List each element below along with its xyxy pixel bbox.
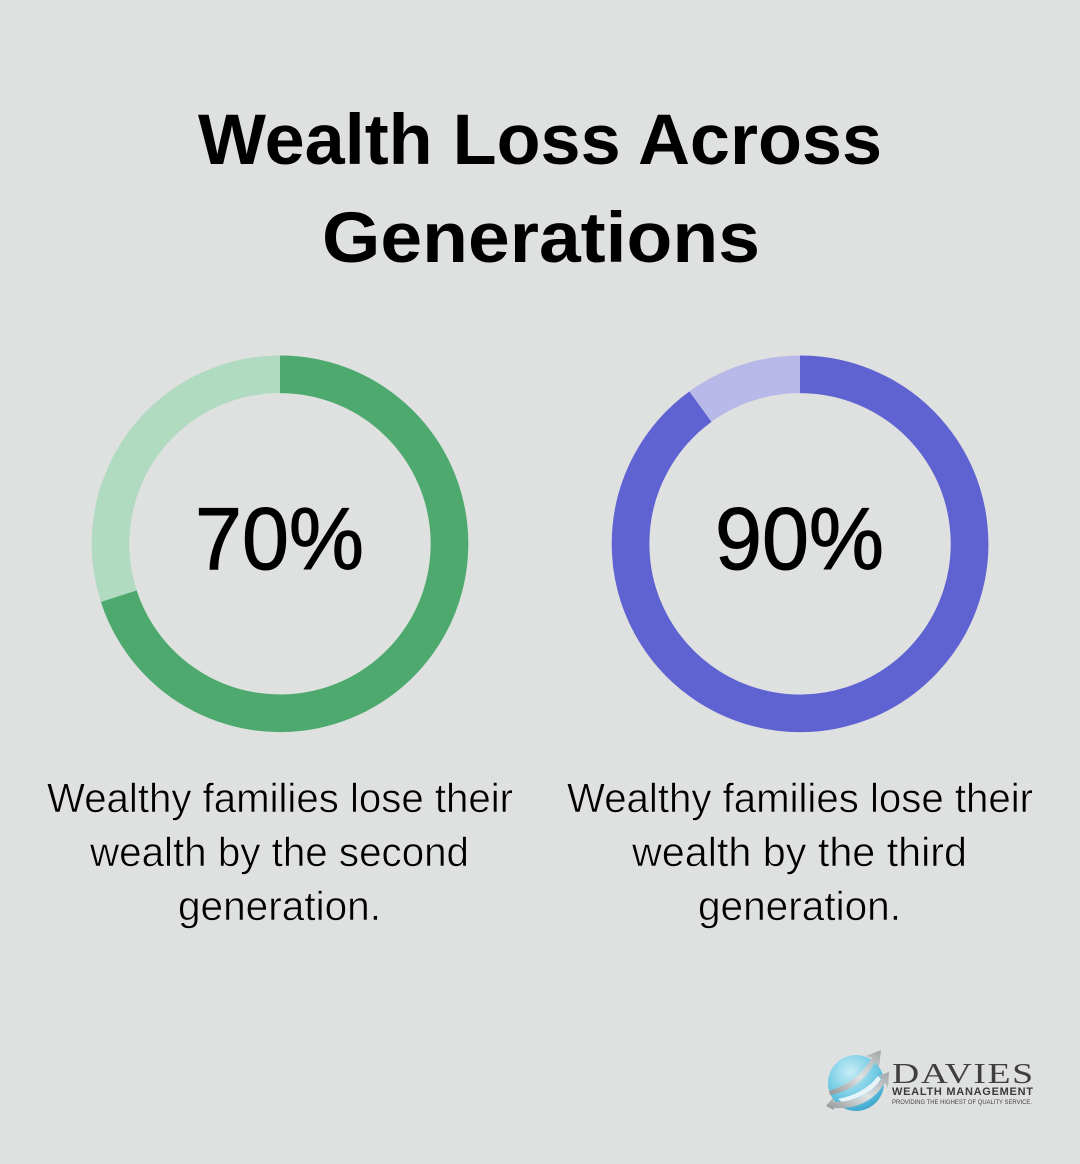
stat: 70%: 70%: [195, 489, 364, 588]
division name: WEALTH MANAGEMENT: [892, 1086, 1033, 1098]
logo: Davies Wealth Management: [826, 1050, 1033, 1111]
description: third generation: generation.: [698, 883, 901, 929]
description: second generation: [47, 775, 513, 929]
description: third generation: Wealthy families lose their: [567, 775, 1033, 821]
description: second generation: wealth by the second: [89, 829, 469, 875]
title: Wealth Loss Across: [198, 101, 882, 180]
description: third generation: [567, 775, 1033, 929]
description: second generation: Wealthy families lose their: [47, 775, 513, 821]
title: Generations: [322, 199, 760, 278]
donut chart: 70%: [110, 374, 450, 713]
title: [198, 101, 882, 278]
stat: 90%: 90%: [715, 489, 884, 588]
icon: globe with arrows: [826, 1050, 889, 1111]
panel: 70 percent second generation: [47, 374, 513, 929]
description: third generation: wealth by the third: [631, 829, 967, 875]
tagline: PROVIDING THE HIGHEST OF QUALITY SERVICE.: [892, 1099, 1032, 1106]
donut chart: 90%: [630, 374, 970, 713]
panel: 90 percent third generation: [567, 374, 1033, 929]
wordmark: DAVIES: [892, 1058, 1033, 1090]
description: second generation: generation.: [178, 883, 381, 929]
